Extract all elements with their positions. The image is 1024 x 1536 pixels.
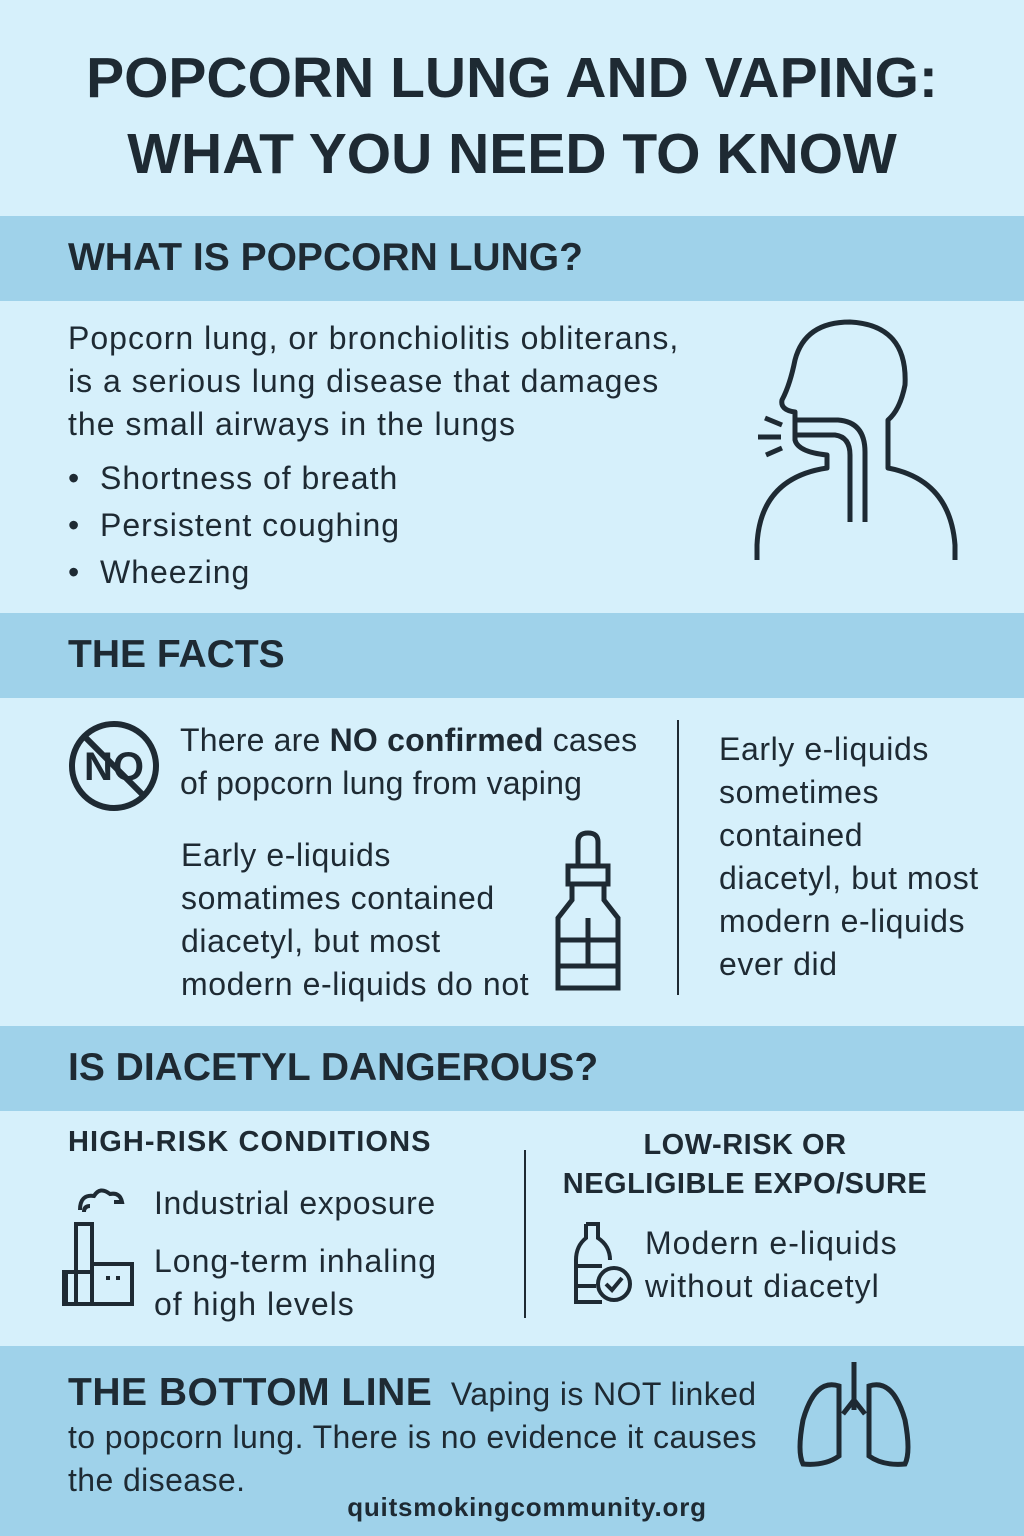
text: bottom line xyxy=(68,1371,757,1498)
text: bottom line: THE BOTTOM LINE Vaping is NOT linked xyxy=(68,1371,756,1414)
title: POPCORN LUNG AND VAPING: xyxy=(86,46,938,110)
divider xyxy=(677,720,679,995)
text: no confirmed cases xyxy=(180,722,637,801)
text: high-risk items: Industrial exposure xyxy=(154,1185,436,1221)
text: bottom line: to popcorn lung. There is no evidence it causes xyxy=(68,1419,757,1455)
band: is diacetyl dangerous: IS DIACETYL DANGEROUS? xyxy=(68,1046,598,1089)
text: of high levels xyxy=(154,1286,355,1322)
icon: head airway xyxy=(754,320,958,560)
heading: low-risk: LOW-RISK OR xyxy=(643,1129,847,1161)
title xyxy=(86,46,938,186)
text: right column: ever did xyxy=(719,946,838,982)
text: definition: Popcorn lung, or bronchiolitis obliterans, xyxy=(68,320,679,356)
text: right column: sometimes xyxy=(719,774,879,810)
panel: bottom line xyxy=(0,1346,1024,1536)
text: right column: modern e-liquids xyxy=(719,903,965,939)
text: early e-liquids xyxy=(181,837,529,1002)
text: no confirmed cases: There are NO confirmed cases xyxy=(180,722,637,758)
title: WHAT YOU NEED TO KNOW xyxy=(127,122,897,186)
text: early e-liquids: diacetyl, but most xyxy=(181,923,441,959)
text: no confirmed cases: of popcorn lung from vaping xyxy=(180,765,582,801)
icon: dropper bottle xyxy=(556,830,620,990)
text: right column xyxy=(719,731,979,982)
text: early e-liquids: modern e-liquids do not xyxy=(181,966,529,1002)
icon: no sign: NO xyxy=(84,745,144,789)
icon: no sign xyxy=(69,721,159,811)
heading: low-risk xyxy=(563,1129,927,1200)
icon: factory xyxy=(62,1188,134,1306)
band: the facts: THE FACTS xyxy=(68,633,285,676)
text: bottom line: the disease. xyxy=(68,1462,245,1498)
text: early e-liquids: somatimes contained xyxy=(181,880,495,916)
text: definition xyxy=(68,320,679,442)
text: definition: is a serious lung disease that damages xyxy=(68,363,659,399)
text: early e-liquids: Early e-liquids xyxy=(181,837,391,873)
text: low-risk item xyxy=(645,1225,898,1304)
band: what is popcorn lung: WHAT IS POPCORN LUNG? xyxy=(68,236,583,279)
url: quitsmokingcommunity.org xyxy=(347,1492,707,1522)
text: definition: the small airways in the lungs xyxy=(68,406,516,442)
text: right column: contained xyxy=(719,817,863,853)
text: low-risk item: without diacetyl xyxy=(645,1268,880,1304)
heading: low-risk: NEGLIGIBLE EXPO/SURE xyxy=(563,1168,927,1200)
icon: bottle with check xyxy=(574,1222,632,1304)
symptom list: • Wheezing xyxy=(68,554,250,590)
band: what is popcorn lung xyxy=(0,216,1024,301)
symptom list: • Shortness of breath xyxy=(68,460,398,496)
band: the facts xyxy=(0,613,1024,698)
symptom list: • Persistent coughing xyxy=(68,507,400,543)
divider xyxy=(524,1150,526,1318)
text: right column: diacetyl, but most xyxy=(719,860,979,896)
symptom list xyxy=(68,460,400,590)
text: low-risk item: Modern e-liquids xyxy=(645,1225,898,1261)
band: is diacetyl dangerous xyxy=(0,1026,1024,1111)
icon: lungs xyxy=(798,1362,910,1467)
heading: high-risk: HIGH-RISK CONDITIONS xyxy=(68,1126,432,1158)
text: right column: Early e-liquids xyxy=(719,731,929,767)
text: Long-term inhaling xyxy=(154,1243,437,1279)
